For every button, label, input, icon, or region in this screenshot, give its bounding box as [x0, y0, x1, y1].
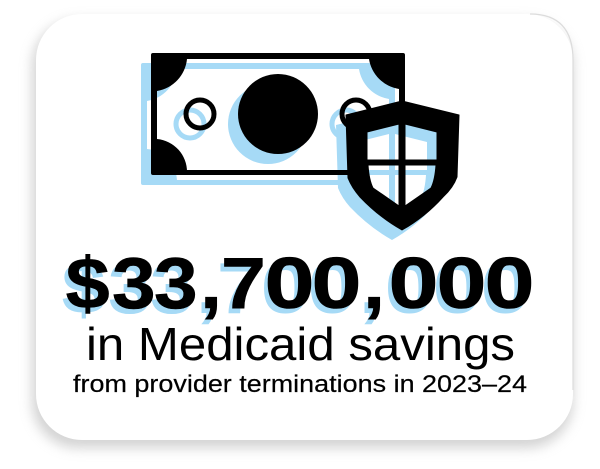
- icon: bill outline: [151, 53, 405, 175]
- heading: amount: 3: [108, 248, 152, 328]
- heading: amount: 0: [480, 249, 531, 329]
- heading: amount: 0: [260, 249, 311, 329]
- heading: amount: 0: [384, 249, 435, 329]
- heading: amount: 0: [484, 244, 535, 324]
- heading: amount: 3: [154, 243, 198, 323]
- icon: bill blue shadow: [141, 63, 395, 185]
- heading: amount: 3: [112, 243, 156, 323]
- heading: amount: $: [62, 248, 106, 329]
- icon: shield white backing: [346, 101, 459, 230]
- heading: amount: 0: [312, 244, 362, 324]
- text: caption: from provider terminations in 2023–24: [73, 371, 527, 398]
- heading: amount: 7: [217, 249, 262, 329]
- heading: amount: 7: [221, 244, 266, 324]
- heading: amount: ,: [200, 243, 222, 324]
- heading: amount: 0: [388, 244, 439, 324]
- heading: amount: 0: [308, 249, 358, 329]
- text: subheading: in Medicaid savings: [86, 318, 515, 370]
- heading: amount: 3: [150, 248, 194, 328]
- heading: amount: ,: [363, 243, 385, 324]
- heading: amount: 0: [432, 249, 483, 329]
- heading: amount: 0: [436, 244, 487, 324]
- heading: amount: $: [66, 243, 110, 324]
- icon: dollar bill with shield: [141, 53, 459, 240]
- icon: shield blue shadow: [336, 111, 449, 240]
- heading: amount: 0: [264, 244, 315, 324]
- heading: amount: ,: [359, 248, 381, 329]
- heading: amount: ,: [196, 248, 218, 329]
- icon: shield: [346, 101, 459, 230]
- heading: amount: [62, 243, 535, 329]
